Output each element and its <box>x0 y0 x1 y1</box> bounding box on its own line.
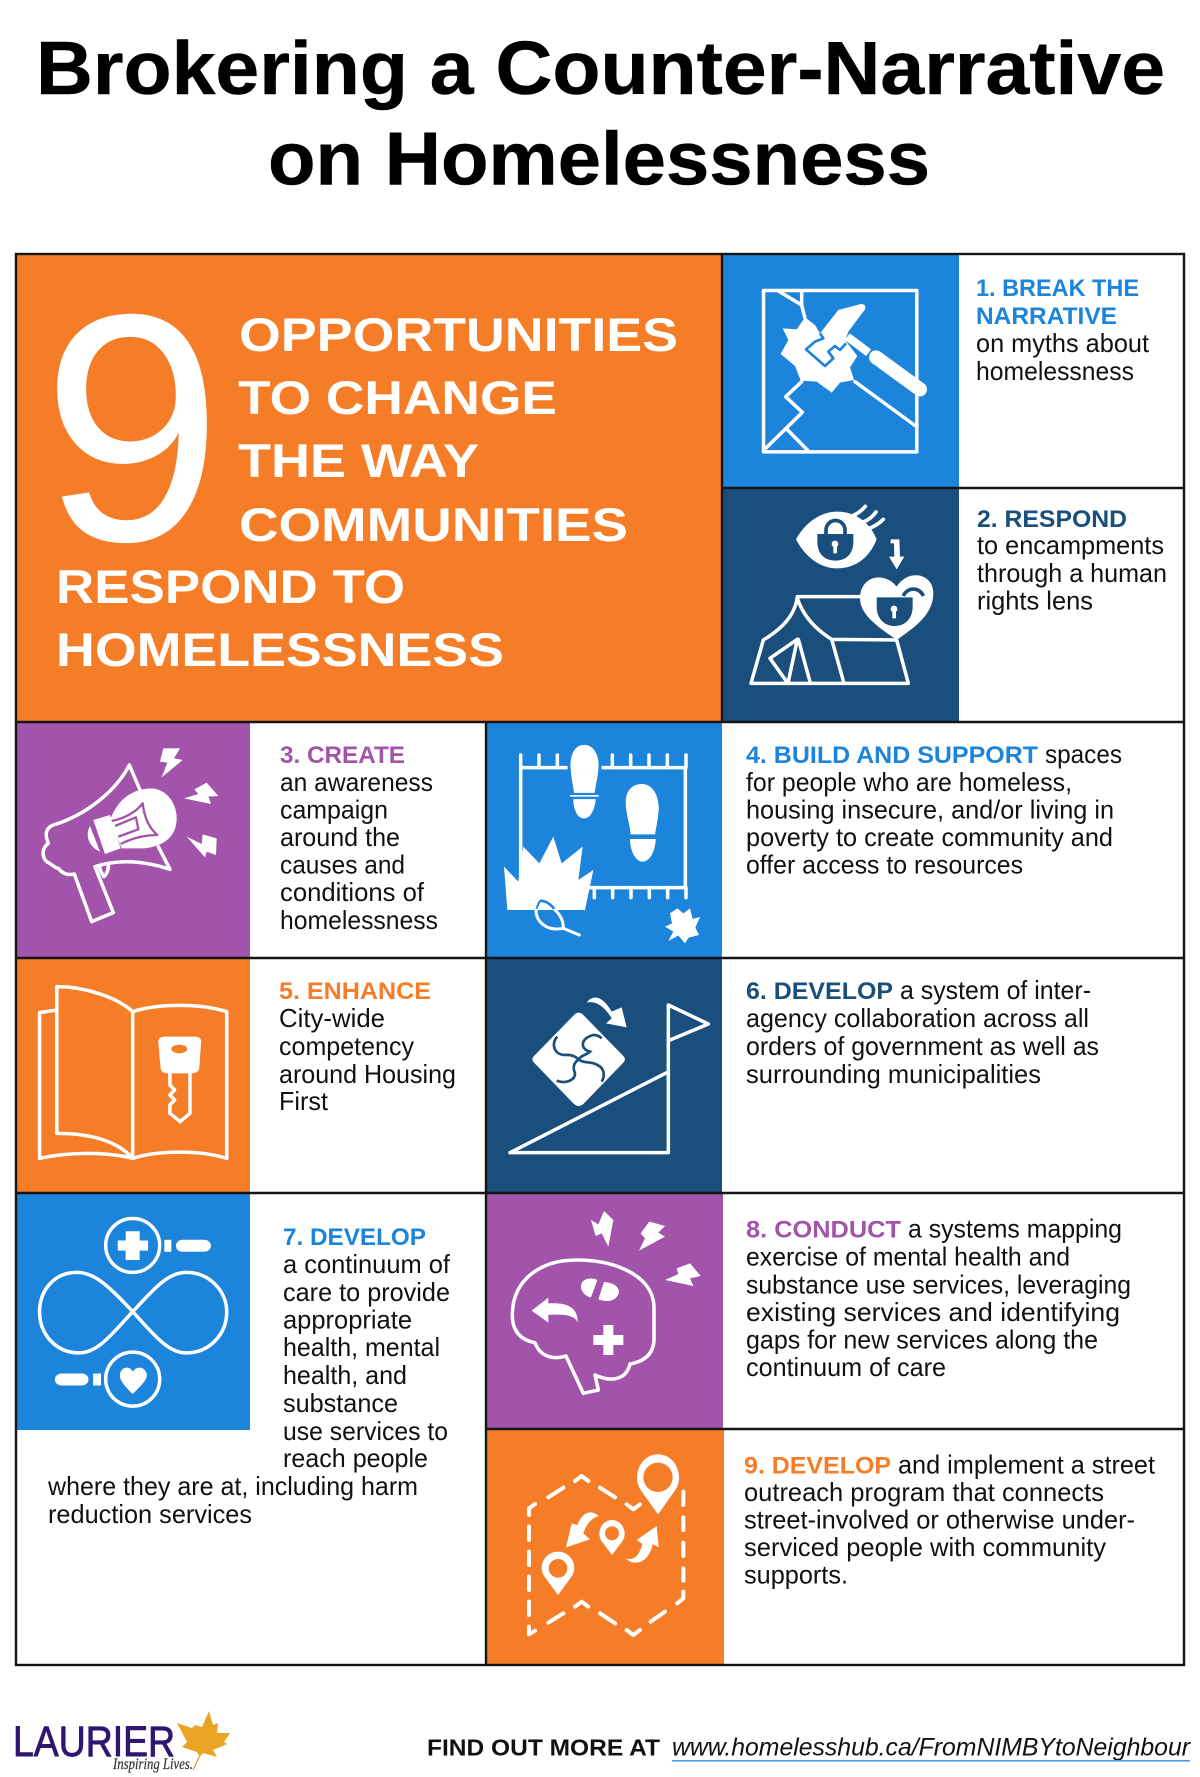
text: item 1: on myths about <box>976 330 1149 358</box>
text: item 5: First <box>279 1088 328 1116</box>
text: item 7: reduction services <box>48 1501 252 1529</box>
text: item 7: care to provide <box>283 1279 450 1307</box>
text: item 4: for people who are homeless, <box>746 769 1072 797</box>
text: item 4: housing insecure, and/or living in <box>746 796 1114 824</box>
hero heading: RESPOND TO <box>56 560 405 613</box>
text: item 8: substance use services, leveraging <box>746 1272 1131 1300</box>
footer link: www.homelesshub.ca/FromNIMBYtoNeighbour <box>672 1734 1192 1762</box>
text: item 4 <box>746 741 1122 880</box>
text: item 6: orders of government as well as <box>746 1033 1099 1061</box>
icon: megaphone with light bulb <box>43 748 218 922</box>
text: item 5: around Housing <box>279 1061 456 1089</box>
text: item 3: 3. CREATE <box>280 743 405 769</box>
text: item 7 <box>47 1225 451 1529</box>
text: item 7: health, mental <box>283 1334 440 1362</box>
footer link <box>427 1734 1192 1762</box>
text: item 4: spaces <box>1045 741 1122 769</box>
text: item 6: surrounding municipalities <box>746 1061 1041 1089</box>
text: item 8: exercise of mental health and <box>746 1244 1070 1272</box>
icon: hammer breaking glass <box>764 290 920 452</box>
text: item 7: substance <box>283 1390 398 1418</box>
panel: 5 enhance <box>16 958 456 1193</box>
text: item 7: where they are at, including harm <box>47 1473 418 1501</box>
panel: 1 break the narrative <box>722 254 1149 488</box>
text: item 7: reach people <box>283 1445 428 1473</box>
text: item 9: 9. DEVELOP <box>744 1454 891 1480</box>
text: item 8: existing services and identifying <box>746 1299 1120 1327</box>
text: item 6: 6. DEVELOP <box>746 979 893 1005</box>
text: item 9: outreach program that connects <box>744 1479 1104 1507</box>
hero heading: OPPORTUNITIES <box>239 308 678 361</box>
text: item 8: a systems mapping <box>908 1216 1122 1244</box>
title: on Homelessness <box>268 116 930 200</box>
text: item 1: 1. BREAK THE <box>976 276 1139 302</box>
title <box>36 26 1165 200</box>
text: item 9: street-involved or otherwise under- <box>744 1506 1135 1534</box>
text: item 4: poverty to create community and <box>746 824 1113 852</box>
icon: dashed map with location pins <box>529 1454 683 1635</box>
text: item 7: use services to <box>283 1418 448 1446</box>
text: item 5: 5. ENHANCE <box>279 979 431 1005</box>
text: item 7: appropriate <box>283 1306 412 1334</box>
icon: infinity with health cross and heart <box>40 1218 227 1406</box>
text: item 3: campaign <box>280 796 388 824</box>
text: item 3: conditions of <box>280 879 425 907</box>
text: item 9: serviced people with community <box>744 1534 1106 1562</box>
panel: 4 build and support <box>486 722 1122 958</box>
icon: eye, heart lock and tent <box>751 506 933 683</box>
text: item 1 <box>976 276 1149 386</box>
panel: 3 create <box>16 722 438 958</box>
icon: puzzle on a slope with flag <box>510 997 708 1153</box>
logo: Laurier: Inspiring Lives. <box>112 1756 193 1773</box>
title: Brokering a Counter-Narrative <box>36 26 1165 110</box>
text: item 3: an awareness <box>280 769 433 797</box>
text: item 8: gaps for new services along the <box>746 1326 1098 1354</box>
text: item 1: NARRATIVE <box>976 304 1117 330</box>
hero heading: HOMELESSNESS <box>56 623 504 676</box>
panel: 7 develop continuum <box>16 1193 451 1529</box>
big number 9: 9 <box>42 247 222 609</box>
panel: 8 conduct <box>486 1193 1131 1429</box>
text: item 9: and implement a street <box>898 1452 1155 1480</box>
text: item 3: around the <box>280 824 400 852</box>
text: item 3: causes and <box>280 852 405 880</box>
logo: Laurier <box>13 1711 230 1773</box>
icon: open book with key <box>40 987 227 1158</box>
text: item 7: health, and <box>283 1362 407 1390</box>
text: item 9: supports. <box>744 1562 848 1590</box>
text: item 8 <box>746 1216 1131 1382</box>
text: item 4: offer access to resources <box>746 852 1023 880</box>
text: item 3 <box>280 743 438 935</box>
panel: 6 develop collaboration <box>486 958 1099 1193</box>
text: item 5 <box>279 979 456 1116</box>
text: item 8: continuum of care <box>746 1354 946 1382</box>
hero heading: TO CHANGE <box>238 371 557 424</box>
text: item 2: to encampments <box>977 532 1164 560</box>
icon: welcome mat with footprints and bush <box>504 743 700 943</box>
text: item 6: a system of inter- <box>900 977 1091 1005</box>
text: item 4: 4. BUILD AND SUPPORT <box>746 743 1039 769</box>
text: item 7: 7. DEVELOP <box>283 1225 426 1251</box>
text: item 6: agency collaboration across all <box>746 1005 1089 1033</box>
text: item 2: 2. RESPOND <box>977 507 1127 533</box>
icon: maple leaf <box>177 1711 230 1770</box>
panel: 2 respond <box>722 488 1167 722</box>
logo: Laurier: LAURIER <box>13 1718 175 1766</box>
text: item 2: through a human <box>977 560 1167 588</box>
hero heading: COMMUNITIES <box>239 498 628 551</box>
panel: 9 develop street outreach <box>486 1429 1155 1665</box>
text: item 8: 8. CONDUCT <box>746 1218 902 1244</box>
text: item 1: homelessness <box>976 358 1134 386</box>
text: item 5: competency <box>279 1033 414 1061</box>
text: item 3: homelessness <box>280 907 438 935</box>
text: item 2 <box>977 507 1167 616</box>
text: item 5: City-wide <box>279 1005 385 1033</box>
footer link: FIND OUT MORE AT <box>427 1734 660 1760</box>
text: item 2: rights lens <box>977 588 1093 616</box>
text: item 7: a continuum of <box>283 1251 451 1279</box>
text: item 6 <box>746 977 1099 1089</box>
text: item 9 <box>744 1452 1155 1590</box>
icon: brain with pill, arrow and cross <box>512 1211 701 1393</box>
hero heading <box>56 308 678 676</box>
hero heading: THE WAY <box>238 434 479 487</box>
panel: 9 opportunities hero <box>16 247 722 722</box>
